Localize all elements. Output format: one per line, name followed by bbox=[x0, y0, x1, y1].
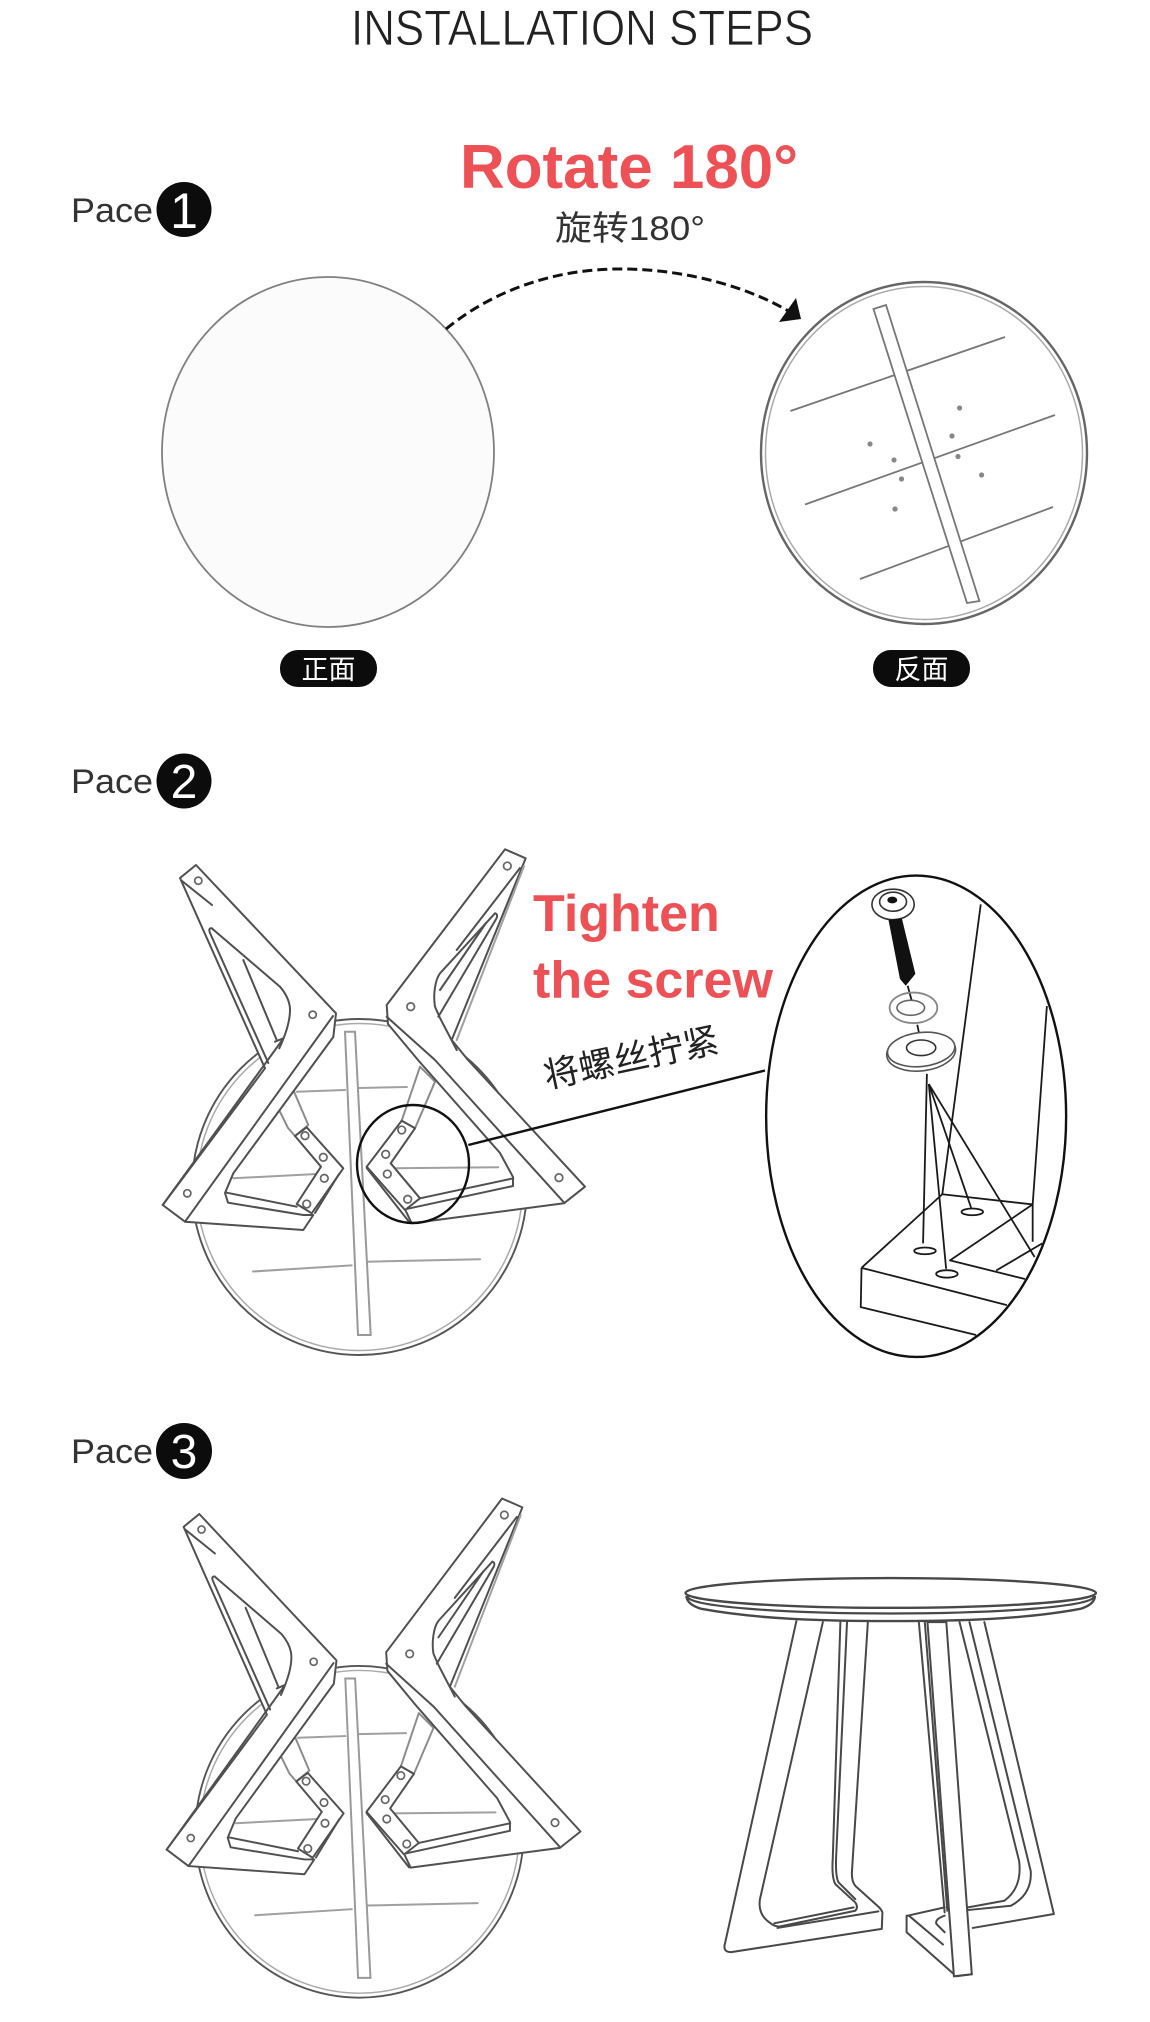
heading: pace 2 bbox=[71, 754, 212, 809]
flat washer bbox=[884, 1029, 958, 1075]
chinese caption: rotate 180: 旋转180° bbox=[555, 210, 705, 248]
chinese caption: tighten the screw: 将螺丝拧紧 bbox=[540, 1021, 722, 1096]
heading: pace 3 bbox=[71, 1423, 212, 1479]
label: back side bbox=[873, 650, 970, 687]
arrow: dashed rotation arc bbox=[446, 269, 801, 329]
heading: pace 2: Pace bbox=[71, 763, 153, 801]
callout: rotate 180: Rotate 180° bbox=[460, 133, 798, 202]
heading: pace 2: 2 bbox=[171, 756, 197, 809]
title: INSTALLATION STEPS bbox=[351, 0, 813, 56]
figure: assembled table bbox=[685, 1578, 1096, 1976]
heading: pace 1 bbox=[71, 182, 212, 239]
heading: pace 3: Pace bbox=[71, 1433, 153, 1471]
callout: tighten the screw: the screw bbox=[533, 952, 773, 1010]
heading: pace 3: 3 bbox=[171, 1426, 197, 1479]
heading: pace 1: Pace bbox=[71, 192, 153, 230]
figure: legs on table, step 3 bbox=[167, 1499, 580, 1998]
table top front face bbox=[162, 277, 494, 627]
right leg bbox=[367, 849, 585, 1223]
callout: tighten the screw: Tighten bbox=[533, 885, 720, 943]
callout: tighten the screw bbox=[533, 885, 773, 1010]
heading: pace 1: 1 bbox=[170, 183, 198, 239]
table top bbox=[685, 1578, 1096, 1621]
callout: circle around bracket with leader line bbox=[357, 1070, 765, 1223]
left leg bbox=[163, 865, 343, 1230]
left leg bbox=[167, 1514, 344, 1874]
label: front side: 正面 bbox=[302, 655, 356, 685]
wood block bbox=[861, 1194, 1042, 1335]
label: front side bbox=[280, 650, 377, 687]
screw bbox=[872, 889, 915, 1003]
lines in detail bbox=[923, 904, 1047, 1269]
label: back side: 反面 bbox=[894, 655, 948, 685]
figure: legs on table, step 2 bbox=[163, 849, 585, 1355]
detail ellipse: screw exploded view bbox=[766, 876, 1066, 1357]
table top back face bbox=[761, 282, 1087, 624]
table underside bbox=[195, 1666, 524, 1998]
table legs bbox=[724, 1621, 1054, 1976]
spring washer bbox=[890, 993, 937, 1043]
right leg bbox=[367, 1499, 580, 1868]
table underside bbox=[192, 1019, 527, 1355]
